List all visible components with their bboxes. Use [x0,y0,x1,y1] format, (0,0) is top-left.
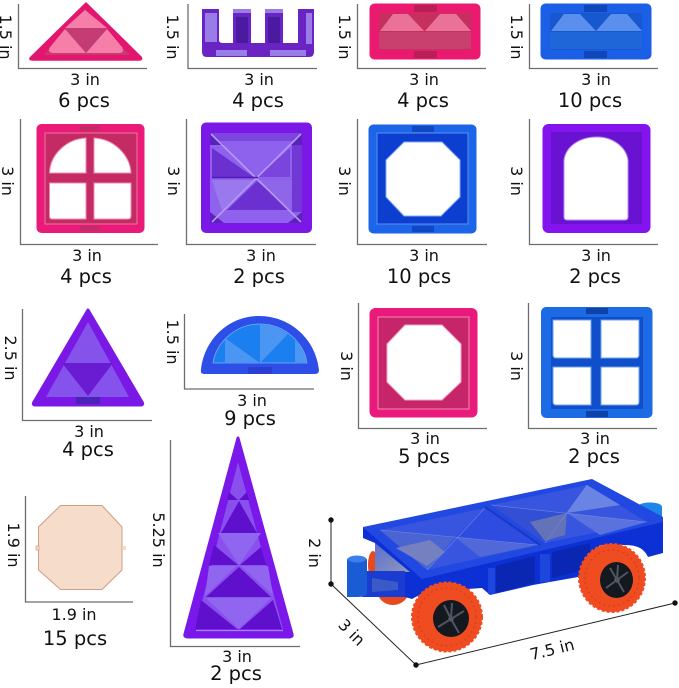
deck panel right [491,485,647,543]
quantity label: 10 pcs [558,89,622,112]
height label: 3 in [507,351,526,381]
width label: 3 in [410,429,440,448]
icon: far left wheel [368,551,409,605]
width label: 3 in [70,70,100,89]
quantity label: 2 pcs [210,662,262,685]
quantity label: 4 pcs [60,265,112,288]
panel: pink rectangle 4 pcs [335,4,486,112]
width label: 3 in [580,429,610,448]
icon: hitch bracket [362,571,405,597]
deck rim [363,479,663,579]
panel: blue window 2 pcs [507,303,657,468]
panel: beige octagon 15 pcs [4,496,133,650]
width label: 3 in [409,246,439,265]
panel: car base with wheels [305,479,678,668]
icon: pink window tile [36,124,144,233]
quantity label: 15 pcs [43,627,107,650]
height label: 3 in [335,166,354,196]
quantity label: 5 pcs [398,445,450,468]
height label: 1.5 in [507,14,526,60]
quantity label: 6 pcs [58,89,110,112]
icon: rear hitch post [638,502,662,525]
icon: blue rectangle tile [540,4,652,60]
icon: purple triangle tile [33,310,143,405]
width label: 3 in [237,391,267,410]
icon: blue semicircle tile [201,316,319,374]
icon: blue window tile [541,307,652,418]
width label: 3 in [409,70,439,89]
icon: front wheel [412,582,482,652]
width label: 3 in [581,70,611,89]
length label: 7.5 in [528,635,576,664]
icon: purple comb tile [202,9,314,57]
icon: right wheel [579,544,645,612]
icon: front hitch post [347,556,367,597]
height label: 5.25 in [149,512,168,568]
panel: blue rectangle 10 pcs [507,4,658,112]
height label: 1.5 in [163,14,182,60]
width label: 3 in [581,246,611,265]
icon: tall purple triangle tile [185,438,292,637]
icon: blue octagon frame tile [368,124,476,234]
quantity label: 4 pcs [62,438,114,461]
icon: car body [363,479,663,599]
quantity label: 10 pcs [387,265,451,288]
panel: purple arch 2 pcs [507,119,658,288]
quantity label: 2 pcs [233,265,285,288]
height label: 1.5 in [163,319,182,365]
dimension lines with dots [328,517,678,668]
quantity label: 9 pcs [224,407,276,430]
icon: beige octagon tile [36,506,126,590]
width label: 3 in [74,422,104,441]
height label: 2.5 in [1,335,20,381]
icon: purple arch tile [542,124,650,233]
quantity label: 2 pcs [568,445,620,468]
icon: pink octagon frame tile [370,308,478,418]
height label: 3 in [507,166,526,196]
width label: 3 in [244,70,274,89]
quantity label: 2 pcs [569,265,621,288]
width label: 1.9 in [51,605,97,624]
panel: pink octagon frame 5 pcs [337,303,487,468]
icon: pink triangle tile [30,3,142,60]
depth label: 3 in [334,615,369,650]
panel: purple square 2 pcs [164,119,316,288]
panel: purple triangle 4 pcs [1,309,152,461]
height label: 3 in [164,166,183,196]
panel: blue octagon frame 10 pcs [335,119,487,288]
height label: 1.5 in [335,14,354,60]
quantity label: 4 pcs [397,89,449,112]
height label: 1.9 in [4,522,23,568]
deck panel left [380,508,538,570]
panel: purple comb 4 pcs [163,4,317,112]
panel: tall purple triangle 2 pcs [149,438,300,685]
panel: pink triangle 6 pcs [0,3,147,112]
quantity label: 4 pcs [232,89,284,112]
height label: 2 in [305,538,324,568]
width label: 3 in [72,246,102,265]
height label: 3 in [337,351,356,381]
width label: 3 in [246,246,276,265]
panel: blue semicircle 9 pcs [163,314,319,430]
panel: pink window 4 pcs [0,119,158,288]
icon: purple square tile [201,122,312,233]
width label: 3 in [222,647,252,666]
icon: pink rectangle tile [370,4,480,60]
